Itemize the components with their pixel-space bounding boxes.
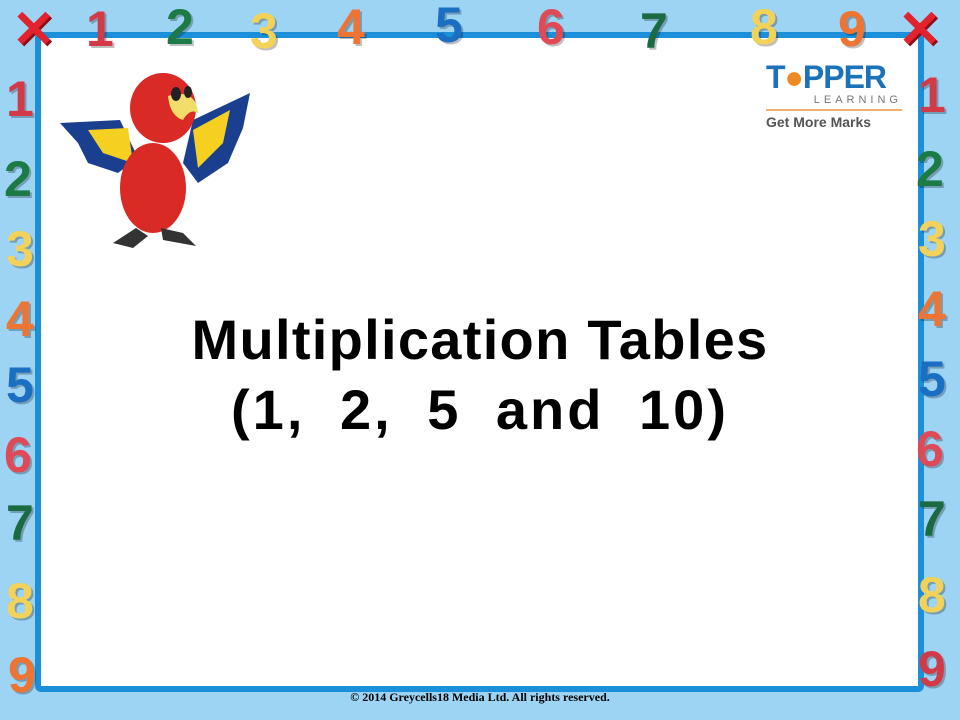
- border numbers: 7: [6, 495, 34, 551]
- border numbers: 1: [86, 1, 114, 57]
- logo: Topper Learning: LEARNING: [814, 94, 902, 106]
- border numbers: 1: [6, 71, 34, 127]
- logo: Topper Learning: Get More Marks: [766, 114, 871, 130]
- title: [192, 308, 768, 441]
- title: Multiplication Tables: [192, 308, 768, 371]
- border numbers: 2: [4, 151, 32, 207]
- border numbers: ✕: [898, 1, 942, 59]
- border numbers: 3: [918, 211, 946, 267]
- border numbers: 2: [166, 0, 194, 55]
- title: (1, 2, 5 and 10): [231, 378, 729, 441]
- footer: copyright: © 2014 Greycells18 Media Ltd. All rights reserved.: [350, 690, 610, 704]
- border numbers: 9: [838, 1, 866, 57]
- logo: Topper Learning: T●PPER: [766, 59, 886, 95]
- border numbers: 4: [337, 0, 365, 55]
- border numbers: 8: [750, 0, 778, 55]
- border numbers: 4: [918, 281, 946, 337]
- border numbers: 3: [6, 221, 34, 277]
- border numbers: 8: [918, 567, 946, 623]
- border numbers: 8: [6, 573, 34, 629]
- border numbers: 6: [4, 427, 32, 483]
- border numbers: ✕: [12, 1, 56, 59]
- border numbers: 4: [6, 291, 34, 347]
- icon: parrot: [60, 73, 250, 248]
- logo: Topper Learning: [766, 59, 902, 130]
- border numbers: 3: [250, 3, 278, 59]
- border numbers: 6: [537, 0, 565, 55]
- border numbers: 5: [918, 351, 946, 407]
- border numbers: 9: [8, 647, 36, 703]
- border numbers: 1: [918, 67, 946, 123]
- border numbers: 7: [640, 3, 668, 59]
- border numbers: 5: [6, 357, 34, 413]
- border numbers: 7: [918, 491, 946, 547]
- border numbers: 6: [916, 421, 944, 477]
- border numbers: 9: [918, 641, 946, 697]
- border numbers: 2: [916, 141, 944, 197]
